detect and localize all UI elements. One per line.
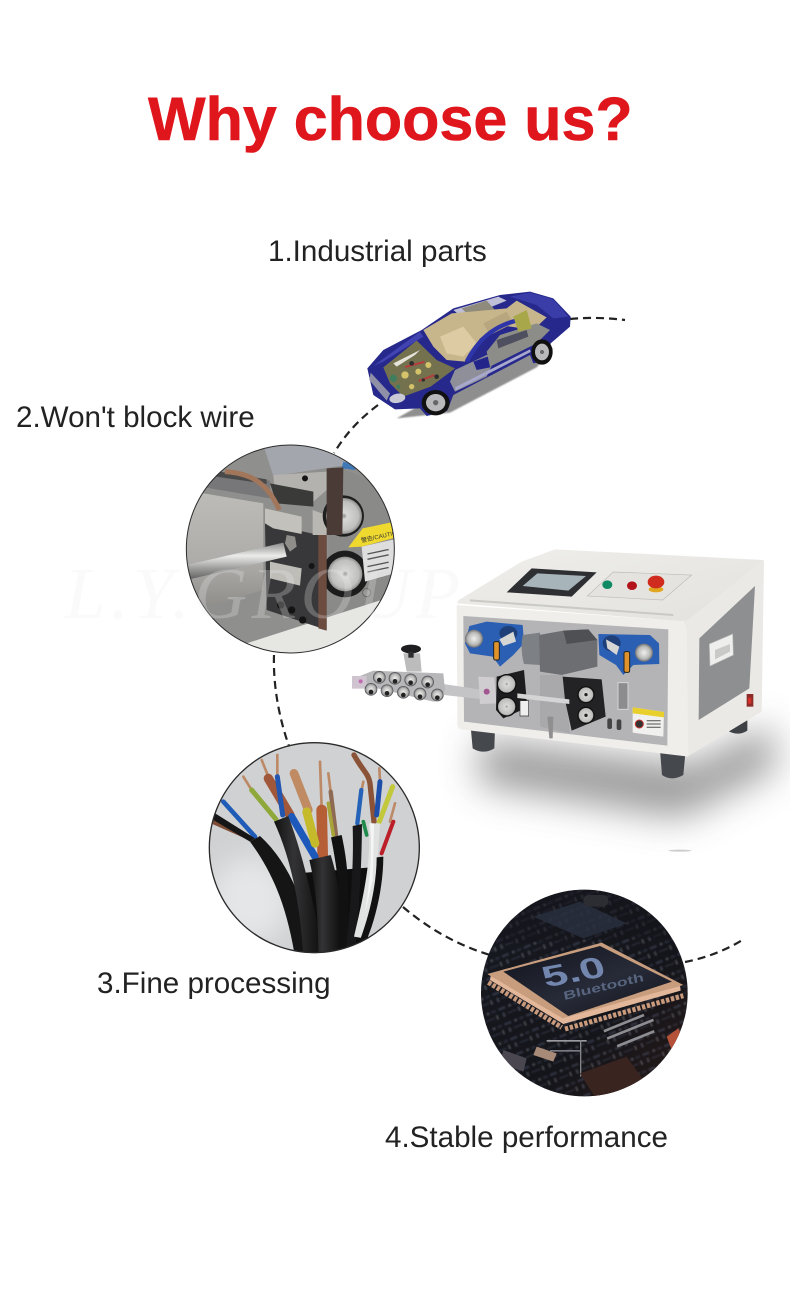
machine side xyxy=(683,560,764,756)
power switch xyxy=(747,694,753,707)
label: 1.Industrial parts: 1.Industrial parts xyxy=(268,235,487,268)
white cable xyxy=(354,823,380,938)
upper silver block xyxy=(265,508,302,534)
blue wires xyxy=(223,802,255,837)
feed nozzle xyxy=(517,693,569,704)
side sill xyxy=(455,349,531,391)
rear wheel xyxy=(531,339,553,365)
icon: cutaway car xyxy=(367,292,571,418)
close-up image area: 警告/CAUTION xyxy=(360,528,402,545)
guide rollers xyxy=(365,671,443,701)
chip text 5.0: 5.0 xyxy=(537,951,610,994)
hood highlight xyxy=(373,332,423,366)
brown strip lower xyxy=(318,535,327,631)
panel window xyxy=(618,683,628,709)
green button xyxy=(602,580,612,589)
car shadow xyxy=(397,348,553,418)
machine front xyxy=(457,605,688,757)
machine top xyxy=(457,549,763,621)
steel rod xyxy=(187,543,287,580)
black bundle base xyxy=(306,868,369,944)
dashed connector: cable circle to chip circle xyxy=(403,907,490,955)
pcb texture xyxy=(481,890,688,1096)
feed head bracket xyxy=(478,677,497,704)
upper disc xyxy=(323,495,364,537)
guide knob xyxy=(403,653,422,672)
lower disc xyxy=(326,550,368,598)
circle outline xyxy=(209,743,419,953)
wire guide arm xyxy=(443,684,483,699)
infographic canvas xyxy=(18,95,790,1153)
dashed connector: car to right edge xyxy=(570,318,625,320)
machine floor shadow xyxy=(480,727,777,817)
side handle xyxy=(709,634,733,666)
dashed connector: wire circle to cable circle xyxy=(274,655,289,746)
front right foot xyxy=(660,750,686,778)
panel knobs xyxy=(465,630,483,648)
plate screws xyxy=(277,475,315,624)
engine bay xyxy=(383,341,455,397)
watermark: L.Y.GROUP xyxy=(64,553,460,634)
green and red wires xyxy=(363,822,367,835)
chip image area xyxy=(481,890,688,1096)
brown wires xyxy=(213,755,393,857)
motor cylinder xyxy=(522,633,540,665)
copper wire xyxy=(225,472,279,510)
icon: cutting machine xyxy=(352,549,777,852)
rear mechanism xyxy=(487,323,550,367)
roof highlight xyxy=(510,293,568,318)
dark rail xyxy=(207,476,270,498)
warm components xyxy=(666,1028,680,1049)
brown strip upper xyxy=(327,467,343,535)
dashed connector: chip circle to right edge xyxy=(685,939,744,962)
dark top fade xyxy=(490,890,683,943)
circle: wire blocking close-up xyxy=(186,444,395,654)
circuit components xyxy=(533,895,655,1077)
lower silver block xyxy=(270,562,302,586)
small black cable xyxy=(360,857,383,943)
red button xyxy=(627,581,637,590)
orange gauges xyxy=(494,642,499,660)
circle outline xyxy=(186,445,394,653)
steel front panel xyxy=(463,616,668,746)
emergency stop xyxy=(649,586,663,592)
cable image area xyxy=(210,743,419,952)
feed rollers xyxy=(496,670,527,718)
circle: cable bundle xyxy=(208,742,420,954)
bare copper strands xyxy=(243,755,395,822)
black roller block xyxy=(563,677,606,731)
cabin interior xyxy=(423,301,547,362)
label: 4.Stable performance: 4.Stable performance xyxy=(385,1121,668,1154)
right grey panel xyxy=(327,463,400,640)
side grey inset xyxy=(699,586,755,720)
yellow-green wires xyxy=(252,790,276,819)
touch screen xyxy=(507,568,597,597)
warning label xyxy=(633,707,664,737)
front wheel xyxy=(422,390,450,415)
black plate xyxy=(265,523,327,630)
chip pins xyxy=(488,982,683,1029)
bright fade xyxy=(214,856,287,940)
left steel plate xyxy=(186,493,264,594)
head block xyxy=(539,629,597,675)
car body xyxy=(367,292,571,416)
door arch xyxy=(467,318,527,362)
close-up image area xyxy=(186,446,394,652)
front left foot xyxy=(471,727,495,752)
circle: Bluetooth chip xyxy=(481,890,688,1096)
wire guide rail xyxy=(352,671,445,702)
label: 3.Fine processing: 3.Fine processing xyxy=(97,967,331,1000)
blue panel left xyxy=(465,622,524,667)
button panel xyxy=(587,572,692,600)
chip frame xyxy=(487,943,683,1022)
bottom white strip xyxy=(247,600,380,652)
rear foot xyxy=(727,717,747,734)
title: Why choose us? xyxy=(148,85,633,153)
grey upper block xyxy=(263,445,350,476)
caution label xyxy=(362,539,394,582)
chip face xyxy=(503,946,672,1016)
black cables xyxy=(250,836,303,952)
hexagon cutter xyxy=(285,535,297,552)
dashed connector: car to wire circle xyxy=(334,405,378,453)
toggle posts xyxy=(607,718,612,729)
blue panel right xyxy=(598,634,659,675)
small floor reflection xyxy=(668,850,692,852)
label: 2.Won't block wire: 2.Won't block wire xyxy=(16,401,255,434)
centre block xyxy=(312,510,327,535)
front grille xyxy=(369,373,390,401)
door mechanism xyxy=(450,355,497,392)
chip text Bluetooth: Bluetooth xyxy=(562,971,645,1003)
